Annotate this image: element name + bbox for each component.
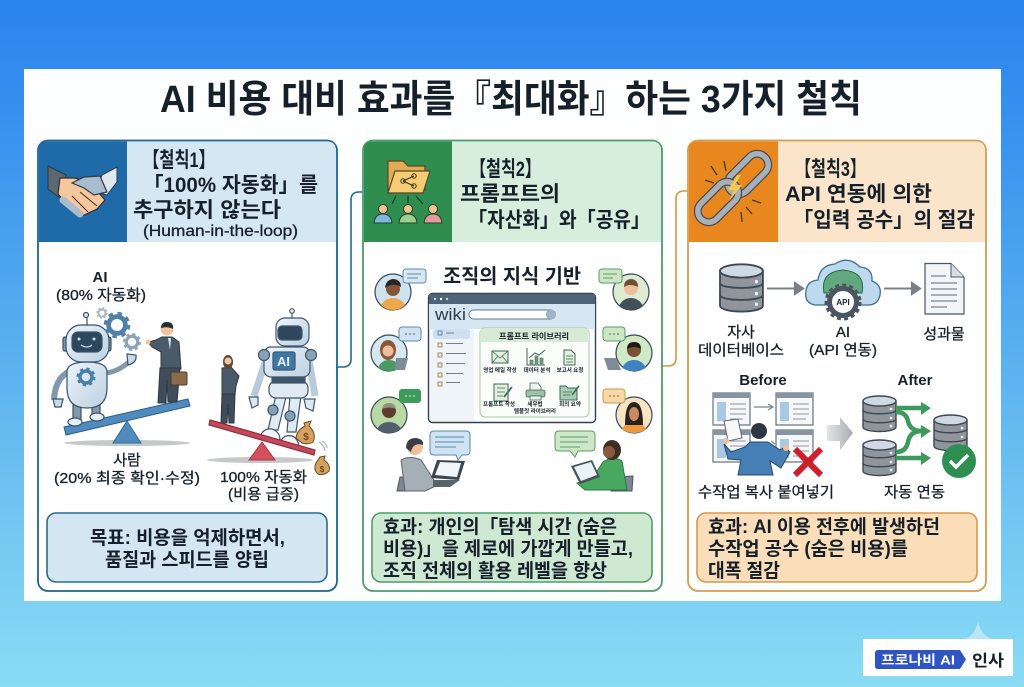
label: AI 80% bbox=[56, 269, 146, 304]
heading: rule 1: 「100% 자동화」를 bbox=[143, 174, 318, 197]
connector: card 2 to card 3 bbox=[662, 191, 688, 366]
effect box 2: 비용)」을 제로에 가깝게 만들고, bbox=[383, 538, 633, 560]
prompt library panel bbox=[480, 328, 589, 417]
heading: rule 3: 「입력 공수」의 절감 bbox=[793, 209, 975, 232]
icon: broken chain bbox=[689, 142, 778, 242]
beam bbox=[64, 399, 190, 435]
after: automatic integration bbox=[863, 372, 976, 501]
label: AI 80%: (80% 자동화) bbox=[56, 287, 146, 304]
heading: rule 2: 【철칙2】 bbox=[470, 158, 541, 181]
wiki window: wiki bbox=[434, 305, 466, 324]
goal box: 품질과 스피드를 양립 bbox=[105, 549, 269, 571]
card 2 header band bbox=[452, 142, 661, 242]
before: manual copy paste bbox=[698, 372, 834, 501]
heading: rule 2: 「자산화」와「공유」 bbox=[468, 209, 650, 232]
heading: rule 1 bbox=[133, 149, 318, 240]
icon: API cloud: API bbox=[836, 298, 850, 307]
icon: meeting notes bbox=[560, 386, 579, 400]
label: 100% automation: (비용 급증) bbox=[228, 486, 299, 503]
watermark logo: 프로나비 AI bbox=[881, 652, 955, 668]
flow labels bbox=[698, 324, 965, 359]
icon: API cloud bbox=[806, 260, 880, 319]
heading: rule 2: 프롬프트의 bbox=[460, 183, 560, 206]
icon: document bbox=[925, 264, 964, 314]
avatar: middle right with laptop bbox=[603, 327, 652, 371]
arrow: AI to output bbox=[884, 283, 920, 294]
icon: shared folder bbox=[364, 142, 452, 242]
panel: rule 2 bbox=[363, 140, 662, 591]
goal box: 목표: 비용을 억제하면서, bbox=[90, 527, 285, 549]
illustration: tilted seesaw with big robot bbox=[207, 309, 329, 475]
effect box 3 bbox=[697, 513, 977, 582]
browser windows bbox=[713, 393, 813, 462]
avatar: top left bbox=[375, 269, 426, 310]
icon: chart bbox=[527, 348, 545, 365]
robot bbox=[53, 312, 136, 426]
icon: databases bbox=[863, 396, 967, 476]
heading: rule 3: 【철칙3】 bbox=[795, 158, 866, 181]
label: 100% automation: 100% 자동화 bbox=[220, 469, 307, 486]
green merge arrows bbox=[896, 402, 931, 465]
goal box bbox=[47, 513, 327, 582]
avatar: lower right bbox=[603, 389, 652, 433]
icon: printer bbox=[526, 383, 545, 400]
prompt library panel: 프롬프트 라이브러리 bbox=[499, 331, 569, 341]
before: manual copy paste: 수작업 복사 붙여넣기 bbox=[698, 484, 834, 501]
panel: rule 1 bbox=[38, 140, 337, 591]
card 1 header band bbox=[127, 142, 336, 242]
effect box 2: 조직 전체의 활용 레벨을 향상 bbox=[383, 560, 607, 582]
panel: rule 3 bbox=[688, 140, 986, 591]
watermark logo bbox=[863, 622, 1013, 676]
connector: card 1 to card 2 bbox=[337, 192, 363, 367]
worker with laptop bbox=[397, 431, 470, 491]
before: manual copy paste: Before bbox=[739, 372, 787, 389]
illustration: balanced seesaw with robot and person bbox=[53, 308, 190, 446]
label: 100% automation bbox=[220, 469, 307, 503]
effect box 3: 효과: AI 이용 전후에 발생하던 bbox=[708, 516, 940, 538]
title: AI 비용 대비 효과를『최대화』하는 3가지 철칙 bbox=[160, 79, 862, 121]
flow labels: 성과물 bbox=[923, 326, 965, 343]
label: person 20%: 사람 bbox=[113, 452, 141, 469]
avatar: top right bbox=[599, 269, 649, 310]
shadow bbox=[207, 457, 313, 463]
library item labels: 세무법 bbox=[527, 400, 543, 408]
person bbox=[723, 419, 790, 475]
effect box 3: 대폭 절감 bbox=[708, 560, 780, 582]
subheading: knowledge base: 조직의 지식 기반 bbox=[443, 265, 581, 288]
icon: mail bbox=[492, 351, 508, 363]
arrow: before to after bbox=[827, 417, 853, 450]
flow labels: 자사 bbox=[727, 324, 755, 341]
library item labels: 데이터 분석 bbox=[524, 366, 550, 374]
label: person 20% bbox=[54, 452, 200, 487]
woman bbox=[221, 355, 239, 423]
money bags: $ bbox=[303, 432, 309, 443]
fulcrum bbox=[113, 421, 141, 443]
flow labels: AI bbox=[836, 324, 850, 341]
icon: check badge bbox=[942, 444, 976, 478]
heading: rule 3 bbox=[785, 158, 975, 232]
library item labels: 회의 요약 bbox=[559, 400, 581, 408]
icon: report bbox=[564, 350, 575, 365]
flow labels: (API 연동) bbox=[809, 342, 877, 359]
library item labels: 보고서 요청 bbox=[557, 366, 583, 374]
label: AI 80%: AI bbox=[92, 269, 108, 286]
person bbox=[146, 322, 187, 403]
beam bbox=[209, 420, 315, 455]
icon: database bbox=[720, 264, 763, 312]
card 3 header band bbox=[777, 142, 985, 242]
flow diagram: database to AI to output bbox=[698, 260, 965, 359]
card 1 frame bbox=[38, 140, 337, 591]
avatar: lower left bbox=[371, 389, 421, 433]
heading: rule 2 bbox=[460, 158, 650, 232]
main white panel bbox=[24, 69, 1001, 601]
arrow: database to AI bbox=[767, 283, 803, 294]
big robot bbox=[249, 309, 316, 447]
fulcrum bbox=[249, 442, 275, 460]
avatar: middle left with laptop bbox=[371, 327, 421, 371]
after: automatic integration: After bbox=[897, 372, 933, 389]
library item labels: 프롬프트 작성 bbox=[483, 400, 515, 408]
library item labels bbox=[483, 366, 583, 415]
icon: prompt edit bbox=[494, 384, 512, 401]
card 2 frame bbox=[363, 140, 662, 591]
library item labels: 템플릿 라이브러리 bbox=[514, 407, 556, 415]
heading: rule 1: (Human-in-the-loop) bbox=[143, 223, 298, 240]
card 3 frame bbox=[688, 140, 986, 591]
flow labels: 데이터베이스 bbox=[698, 342, 784, 359]
worker with tablet bbox=[555, 431, 633, 491]
heading: rule 1: 【철칙1】 bbox=[143, 149, 215, 172]
watermark logo: 인사 bbox=[972, 652, 1004, 670]
icon: handshake bbox=[39, 142, 127, 242]
library item labels: 영업 메일 작성 bbox=[483, 366, 517, 374]
label: person 20%: (20% 최종 확인·수정) bbox=[54, 470, 200, 487]
illustration: tilted seesaw with big robot: AI bbox=[277, 354, 290, 369]
heading: rule 3: API 연동에 의한 bbox=[785, 183, 932, 206]
effect box 3: 수작업 공수 (숨은 비용)를 bbox=[708, 538, 908, 560]
money bags: $ bbox=[320, 465, 325, 474]
effect box 2: 효과: 개인의「탐색 시간 (숨은 bbox=[383, 516, 617, 538]
effect box 2 bbox=[372, 513, 652, 582]
after: automatic integration: 자동 연동 bbox=[884, 484, 945, 501]
wiki window bbox=[428, 294, 596, 422]
shadow bbox=[64, 440, 190, 446]
money bags bbox=[296, 421, 329, 475]
red X bbox=[795, 449, 821, 475]
heading: rule 1: 추구하지 않는다 bbox=[133, 199, 281, 222]
